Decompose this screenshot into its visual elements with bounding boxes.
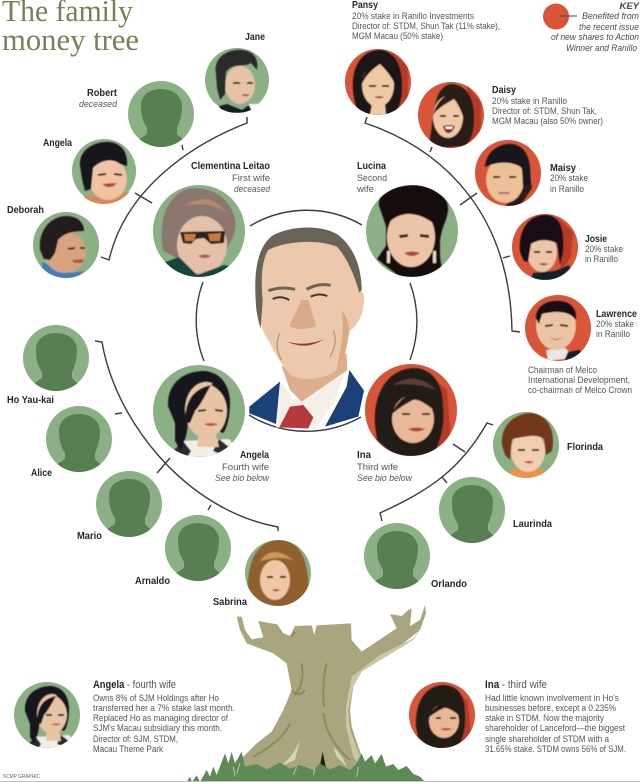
child: Florinda: Florinda (567, 442, 603, 453)
name: Ina (357, 450, 412, 483)
name: Ina: Third wife (357, 462, 398, 472)
child: Lawrence: Chairman of Melco (528, 365, 597, 375)
family branch: second wife's children (365, 117, 520, 332)
name: Clementina: Clementina Leitao (191, 161, 270, 172)
wife: Lucina (356, 161, 458, 277)
bio text: Angela: Angela - fourth wife (93, 679, 176, 691)
bio text: Ina: Ina - third wife (485, 679, 547, 691)
bio: Angela fourth wife (14, 679, 235, 754)
child: Maisy: Maisy (550, 163, 576, 174)
child: Jane: Jane (245, 32, 265, 43)
child: Josie (512, 214, 623, 280)
child: Mario: Mario (77, 531, 102, 542)
child: Ho Yau-kai (7, 325, 89, 406)
child: Pansy: Pansy (352, 0, 378, 11)
child: Jane (205, 32, 270, 113)
child: Pansy (345, 0, 500, 115)
child: Alice (31, 406, 112, 479)
child: Pansy: MGM Macau (50% stake) (352, 31, 443, 41)
portrait: Ina (365, 364, 457, 457)
portrait: Ina small (409, 682, 475, 749)
child: Lawrence: 20% stake (596, 319, 634, 329)
portrait: Clementina (153, 185, 245, 281)
wife: Angela (153, 365, 269, 483)
child: Florinda (493, 412, 603, 478)
child: Ho Yau-kai: Ho Yau-kai (7, 395, 54, 406)
name: Clementina: deceased (234, 184, 271, 194)
child: Daisy: Daisy (492, 85, 516, 96)
child: Laurinda: Laurinda (513, 519, 552, 530)
child: Pansy: Director of: STDM, Shun Tak (11% stake), (352, 21, 500, 31)
name: Angela: Fourth wife (222, 462, 269, 472)
bio text: Ina: shareholder of Lanceford—the biggest (485, 723, 625, 733)
bio text: Ina (485, 679, 626, 754)
title (2, 0, 139, 57)
grass (187, 752, 425, 782)
family branch: third wife's children (380, 423, 493, 521)
title: money tree (2, 22, 139, 57)
portrait: Angela fourth wife (153, 365, 245, 461)
name: Lucina (356, 161, 387, 194)
wife: Ina (357, 364, 457, 483)
key: KEY (619, 1, 640, 12)
bio text: Ina: Had little known involvement in Ho's (485, 693, 619, 703)
credit: SCMP GRAPHIC (3, 774, 40, 780)
portrait: Stanley Ho (249, 227, 364, 429)
wife: Clementina Leitao (153, 161, 271, 281)
child: Laurinda (439, 477, 552, 550)
bio text: Angela: Replaced Ho as managing director of (93, 713, 228, 723)
child: Sabrina: Sabrina (213, 597, 247, 608)
child: Daisy (418, 82, 603, 148)
bio text: Angela: Director of: SJM, STDM, (93, 734, 178, 744)
child: Deborah (7, 205, 99, 279)
tree trunk (233, 605, 426, 775)
name: Angela: See bio below (215, 473, 269, 483)
bio text: Angela: Macau Theme Park (93, 744, 163, 754)
name: Clementina (191, 161, 271, 194)
child: Pansy: 20% stake in Ranillo Investments (352, 11, 474, 21)
bio text: Angela: SJM's Macau subsidiary this month. (93, 723, 222, 733)
family branch: first wife's children (101, 117, 247, 260)
child: Daisy: MGM Macau (also 50% owner) (492, 116, 603, 126)
child: Robert: deceased (79, 99, 118, 109)
name: Angela: Angela (240, 450, 269, 461)
child: Angela: Angela (43, 138, 72, 149)
name: Lucina: Second (357, 173, 387, 183)
bio text: Angela: Owns 8% of SJM Holdings after Ho (93, 693, 219, 703)
child: Daisy: 20% stake in Ranillo (492, 96, 567, 106)
child: Arnaldo: Arnaldo (135, 576, 170, 587)
child: Lawrence (525, 295, 637, 395)
child: Lawrence: co-chairman of Melco Crown (528, 385, 632, 395)
central ring connecting Ho to wives (196, 210, 417, 431)
child: Maisy: in Ranillo (550, 184, 584, 194)
name: Lucina: Lucina (357, 161, 386, 172)
key (543, 1, 640, 54)
name: Angela (215, 450, 269, 483)
child: Josie: Josie (585, 234, 607, 245)
portrait: Angela small (14, 682, 80, 751)
bio text: Ina: stake in STDM. Now the majority (485, 713, 604, 723)
name: Clementina: First wife (232, 173, 270, 183)
child: Arnaldo (135, 515, 231, 588)
child: Orlando (364, 523, 467, 596)
child: Lawrence: in Ranillo (596, 329, 630, 339)
bio text: Angela: transferred her a 7% stake last month. (93, 703, 235, 713)
child: Orlando: Orlando (431, 579, 467, 590)
family branch: fourth wife's children (95, 341, 278, 531)
child: Alice: Alice (31, 468, 52, 479)
bio text: Angela (93, 679, 235, 754)
name: Lucina: wife (356, 184, 374, 194)
child: Josie: in Ranillo (585, 254, 618, 264)
child: Sabrina (213, 540, 311, 608)
bio text: Ina: businesses before, except a 0.235% (485, 703, 616, 713)
child: Maisy (475, 140, 588, 206)
child: Josie: 20% stake (585, 244, 623, 254)
child: Deborah: Deborah (7, 205, 44, 216)
bio: Ina third wife (409, 679, 626, 754)
name: Ina: Ina (357, 450, 371, 461)
child: Robert (79, 81, 194, 154)
name: Ina: See bio below (357, 473, 412, 483)
child: Daisy: Director of: STDM, Shun Tak, (492, 106, 597, 116)
child: Angela (43, 138, 136, 205)
child: Maisy: 20% stake (550, 173, 588, 183)
child: Lawrence: International Development, (528, 375, 630, 385)
child: Mario (77, 471, 162, 544)
child: Robert: Robert (87, 88, 118, 99)
portrait: Lucina (366, 185, 458, 277)
bio text: Ina: single shareholder of STDM with a (485, 734, 609, 744)
